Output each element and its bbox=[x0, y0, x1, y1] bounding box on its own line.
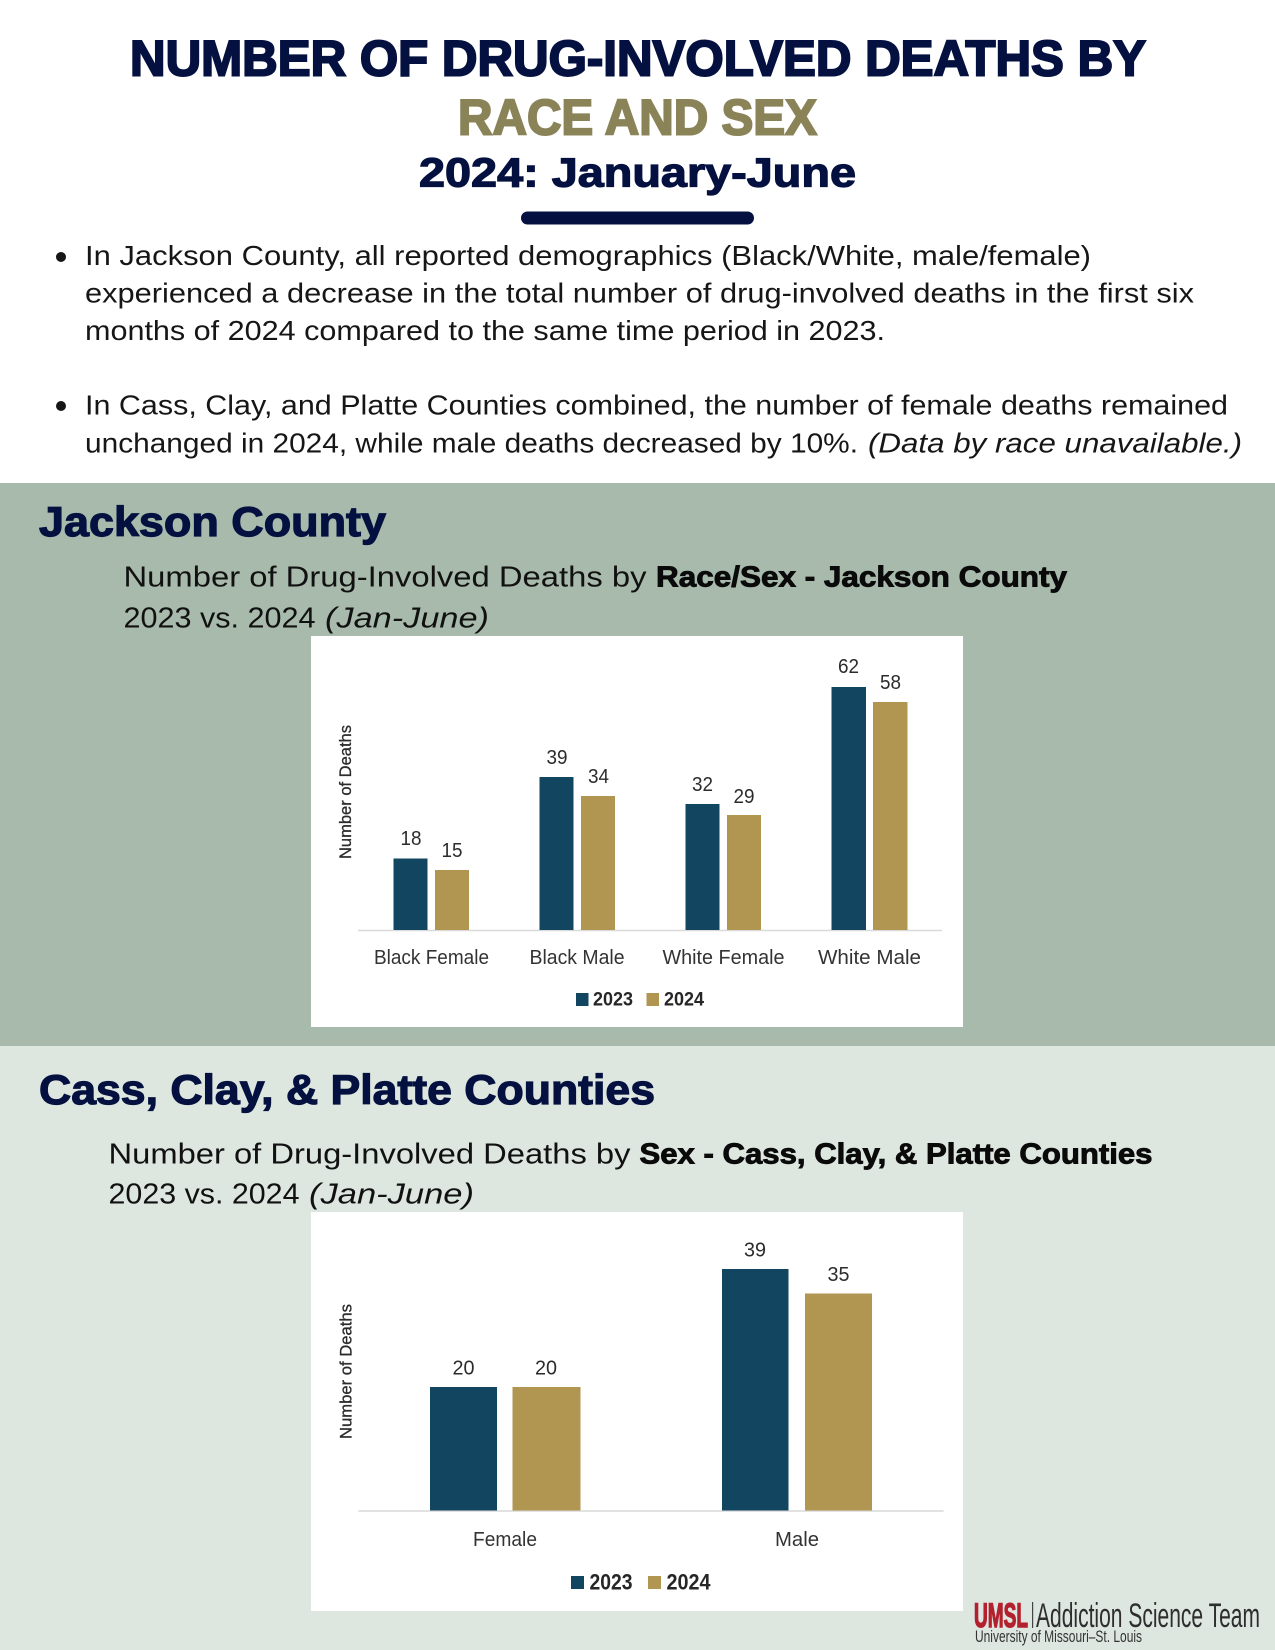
title line: race and sex: RACE AND SEX bbox=[458, 90, 817, 146]
legend: 2023 bbox=[590, 1570, 632, 1594]
axis title: Number of Deaths bbox=[337, 725, 355, 859]
chart caption: Cass, Clay, and Platte Counties: (Jan-June) bbox=[309, 1178, 474, 1210]
category labels bbox=[473, 1529, 819, 1551]
logo: UMSL Addiction Science Team: University of Missouri–St. Louis bbox=[975, 1628, 1142, 1646]
bars: Black Female: 15 bbox=[442, 840, 462, 862]
chart caption: Jackson County: 2023 vs. 2024 bbox=[124, 602, 316, 634]
logo: UMSL Addiction Science Team: UMSL bbox=[974, 1597, 1028, 1635]
chart caption: Jackson County: (Jan-June) bbox=[325, 602, 489, 634]
bullet: Cass, Clay, and Platte finding: (Data by race unavailable.) bbox=[868, 428, 1242, 458]
bullet: Cass, Clay, and Platte finding bbox=[56, 390, 1242, 458]
text block: key findings bullets bbox=[56, 240, 1242, 458]
bullet: Jackson County finding: In Jackson County, all reported demographics (Black/White, male/female) bbox=[85, 240, 1091, 271]
bars: White Female: 32 bbox=[692, 774, 713, 796]
bars: White Female: 29 bbox=[734, 786, 754, 808]
bars: White Female bbox=[686, 774, 761, 930]
bars: Black Male: 39 bbox=[546, 747, 568, 769]
category labels: Male bbox=[775, 1529, 819, 1551]
bullet: Jackson County finding bbox=[56, 240, 1194, 346]
title underline bar bbox=[521, 212, 754, 224]
legend: 2023 bbox=[593, 988, 633, 1010]
bar chart: deaths by race and sex, Jackson County bbox=[311, 636, 963, 1027]
category labels: Black Female bbox=[374, 947, 489, 969]
bars: White Male bbox=[832, 656, 908, 930]
panel: Cass, Clay, and Platte Counties bbox=[0, 1046, 1275, 1650]
category labels: White Female bbox=[662, 947, 784, 969]
bars: Black Female bbox=[394, 828, 469, 930]
legend: 2024 bbox=[666, 1570, 711, 1594]
chart caption: Cass, Clay, and Platte Counties: 2023 vs. 2024 bbox=[108, 1178, 300, 1210]
legend: 2024 bbox=[664, 988, 704, 1010]
title line: number of drug-involved deaths by: NUMBER OF DRUG-INVOLVED DEATHS BY bbox=[130, 30, 1146, 86]
category labels bbox=[374, 947, 921, 969]
bullet: Jackson County finding: months of 2024 compared to the same time period in 2023. bbox=[85, 315, 885, 346]
bars: Female: 20 bbox=[535, 1358, 557, 1380]
bars: Female bbox=[430, 1358, 580, 1510]
panel: Jackson County bbox=[0, 483, 1275, 1046]
bars: Black Male: 34 bbox=[588, 766, 609, 788]
axis title: Number of Deaths bbox=[338, 1304, 356, 1439]
bars: Female: 20 bbox=[452, 1358, 474, 1380]
category labels: Black Male bbox=[530, 947, 624, 969]
chart caption: Jackson County bbox=[124, 562, 1067, 634]
legend bbox=[576, 988, 704, 1010]
bullet: Cass, Clay, and Platte finding: In Cass, Clay, and Platte Counties combined, the number of female deaths remained bbox=[85, 390, 1228, 420]
logo: UMSL Addiction Science Team bbox=[974, 1597, 1260, 1646]
bars: Male: 35 bbox=[828, 1264, 850, 1286]
chart caption: Jackson County: Race/Sex - Jackson County bbox=[656, 562, 1067, 594]
bars: Male bbox=[722, 1240, 872, 1510]
legend bbox=[571, 1570, 711, 1594]
bars: White Male: 58 bbox=[880, 672, 901, 694]
subtitle: time period: 2024: January-June bbox=[419, 150, 856, 196]
chart caption: Cass, Clay, and Platte Counties: Sex - Cass, Clay, & Platte Counties bbox=[640, 1138, 1152, 1170]
chart caption: Cass, Clay, and Platte Counties bbox=[108, 1138, 1152, 1210]
chart caption: Jackson County: Number of Drug-Involved Deaths by bbox=[124, 562, 647, 594]
chart caption: Cass, Clay, and Platte Counties: Number of Drug-Involved Deaths by bbox=[108, 1138, 631, 1170]
category labels: White Male bbox=[818, 947, 921, 969]
bar chart: deaths by sex, Cass, Clay, and Platte Counties bbox=[311, 1212, 963, 1611]
bars: Male: 39 bbox=[744, 1240, 766, 1262]
bars: Black Male bbox=[540, 747, 615, 930]
heading: Jackson County: Jackson County bbox=[39, 498, 387, 545]
category labels: Female bbox=[473, 1529, 537, 1551]
bars: White Male: 62 bbox=[838, 656, 859, 678]
bars: Black Female: 18 bbox=[400, 828, 422, 850]
heading: Cass, Clay, and Platte Counties: Cass, Clay, & Platte Counties bbox=[39, 1066, 655, 1113]
bullet: Cass, Clay, and Platte finding: unchanged in 2024, while male deaths decreased by 10%. bbox=[85, 428, 858, 458]
bullet: Jackson County finding: experienced a decrease in the total number of drug-involved deaths in the first six bbox=[85, 278, 1194, 308]
title block bbox=[130, 30, 1146, 224]
